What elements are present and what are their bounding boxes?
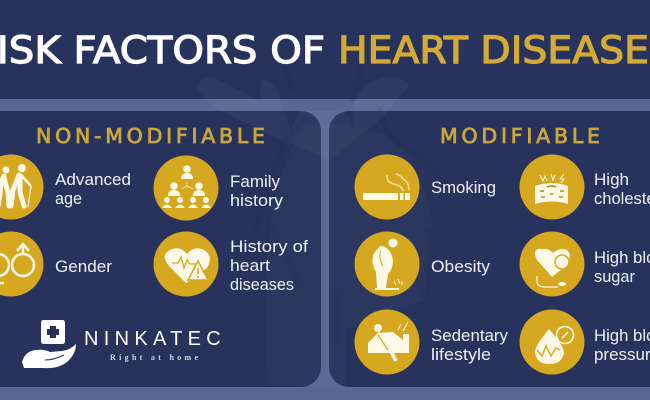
section: non-modifiable items bbox=[0, 124, 308, 368]
item: gender: Gender bbox=[55, 258, 113, 276]
item: advanced age: age bbox=[55, 190, 82, 208]
background band bbox=[0, 99, 650, 400]
section heading: non-modifiable: NON-MODIFIABLE bbox=[36, 124, 265, 148]
item: family history: history bbox=[230, 192, 284, 210]
item: high blood sugar: sugar bbox=[594, 268, 635, 286]
heart watermark bbox=[197, 66, 437, 387]
item: high blood sugar bbox=[520, 232, 650, 296]
item: history of heart diseases bbox=[154, 232, 308, 296]
panel: non-modifiable background bbox=[0, 111, 321, 387]
section: modifiable items bbox=[354, 124, 650, 374]
panel: modifiable background bbox=[329, 111, 650, 387]
item: family history: Family bbox=[230, 173, 281, 191]
item: high blood pressure bbox=[520, 310, 650, 374]
item: sedentary lifestyle: Sedentary bbox=[431, 327, 509, 345]
item: gender bbox=[0, 232, 113, 296]
item: history of heart diseases: diseases bbox=[230, 276, 294, 294]
icon: hand with medical cross bbox=[22, 320, 76, 368]
item: smoking bbox=[354, 154, 496, 220]
logo: Ninkatec: NINKATEC bbox=[84, 328, 226, 350]
item: history of heart diseases: heart bbox=[230, 257, 270, 275]
item: advanced age: Advanced bbox=[55, 171, 131, 189]
item: advanced age bbox=[0, 154, 131, 220]
logo: Ninkatec: Right at home bbox=[110, 353, 201, 362]
item: smoking: Smoking bbox=[431, 179, 496, 197]
item: history of heart diseases: History of bbox=[230, 238, 308, 256]
item: family history bbox=[154, 156, 284, 220]
logo: Ninkatec bbox=[22, 320, 226, 368]
title bbox=[0, 29, 649, 72]
item: obesity: Obesity bbox=[431, 258, 491, 276]
title: HEART DISEASE bbox=[338, 29, 649, 72]
item: sedentary lifestyle: lifestyle bbox=[431, 346, 491, 364]
item: high cholesterol bbox=[520, 154, 650, 220]
item: sedentary lifestyle bbox=[354, 310, 509, 374]
section heading: modifiable: MODIFIABLE bbox=[440, 124, 600, 148]
item: obesity bbox=[354, 232, 491, 296]
item: high cholesterol: High bbox=[594, 171, 629, 189]
